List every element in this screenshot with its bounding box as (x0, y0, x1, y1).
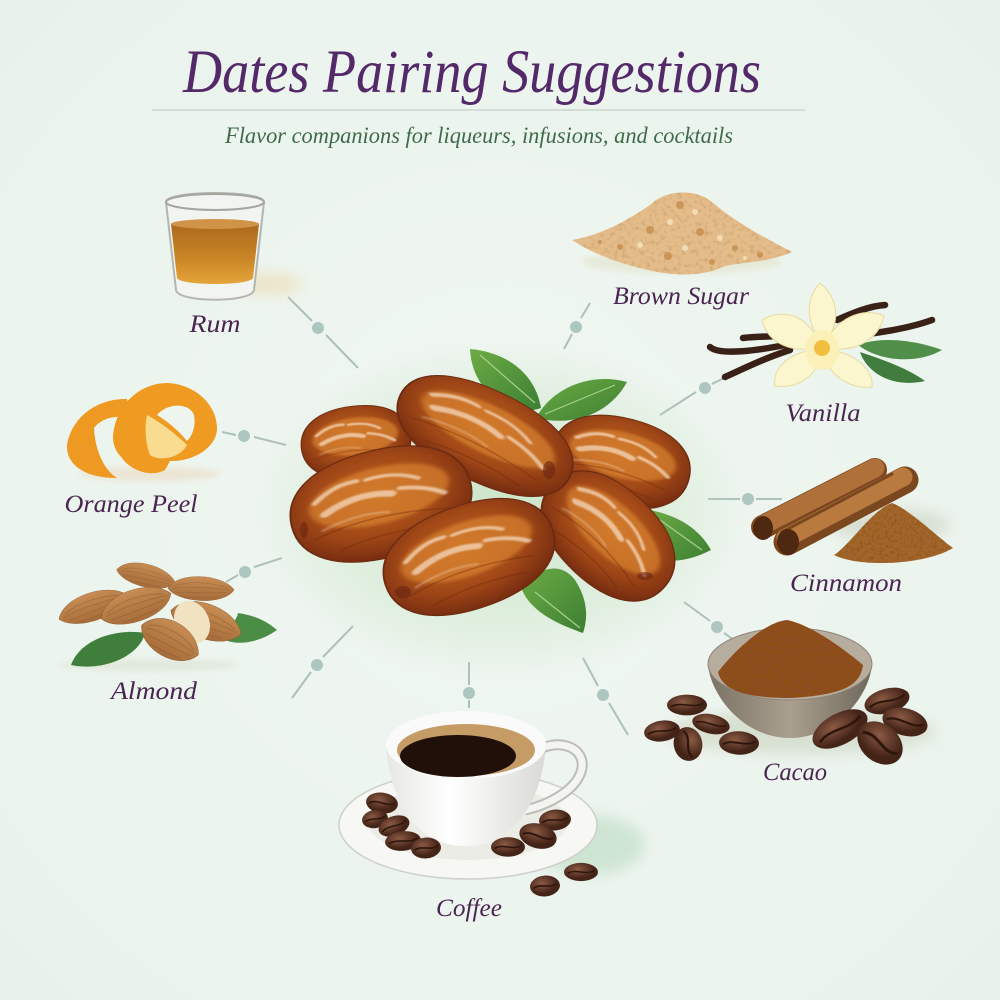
connector: cacao (684, 602, 734, 640)
connector lines (222, 297, 782, 735)
leaf: top left (470, 349, 541, 410)
leaf: top right (536, 379, 627, 421)
date: left front (279, 429, 483, 579)
coffee (397, 724, 535, 776)
date: right front (519, 448, 697, 624)
icon: coffee cup (339, 711, 645, 898)
date: right (542, 402, 700, 522)
date: left back (297, 400, 415, 484)
icon: cacao (643, 620, 935, 774)
connector: vanilla (660, 378, 724, 415)
connector: coffee (463, 662, 475, 708)
title: Dates Pairing Suggestions (182, 39, 761, 106)
coffee beans (365, 790, 399, 816)
almond nuts (114, 557, 178, 594)
connector: rum (288, 297, 358, 368)
label: cacao: Cacao (763, 759, 827, 786)
saucer (339, 771, 597, 879)
label: rum: Rum (188, 311, 240, 338)
label: almond: Almond (109, 678, 198, 705)
vanilla leaves (858, 340, 942, 359)
almond leaves (71, 632, 145, 667)
cup body (386, 745, 546, 846)
connector: almond lower (292, 626, 353, 698)
label: brown sugar: Brown Sugar (613, 283, 749, 310)
label: coffee: Coffee (436, 895, 502, 922)
connector: almond (226, 558, 282, 582)
connector: orange peel (222, 430, 286, 445)
label: cinnamon: Cinnamon (790, 570, 902, 597)
leaf: right (650, 510, 711, 561)
label: vanilla: Vanilla (786, 400, 860, 427)
date: top centre (380, 353, 590, 519)
icon: rum glass (166, 193, 302, 300)
cocoa powder (718, 620, 863, 698)
subtitle: Flavor companions for liqueurs, infusions, and cocktails (224, 123, 733, 148)
cinnamon sticks (763, 468, 905, 542)
icon: orange peel (67, 383, 220, 481)
connector: cacao lower (583, 658, 628, 735)
cacao bowl (708, 662, 872, 738)
connector: cinnamon (708, 493, 782, 505)
cup handle (525, 745, 582, 810)
title divider (152, 109, 805, 111)
vanilla flower (762, 283, 884, 387)
icon: cinnamon (753, 468, 953, 563)
icon: almonds (54, 557, 277, 671)
cinnamon powder (834, 503, 953, 563)
date: bottom (369, 479, 569, 635)
label: orange peel: Orange Peel (64, 491, 198, 518)
cacao beans (667, 695, 707, 715)
icon: dates with leaves (250, 340, 750, 680)
leaf: bottom (522, 569, 586, 633)
date end dimples (300, 461, 653, 598)
icon: brown sugar (572, 193, 792, 274)
almond kernel (167, 595, 217, 649)
icon: vanilla (710, 283, 942, 387)
connector: brown sugar (564, 303, 590, 349)
